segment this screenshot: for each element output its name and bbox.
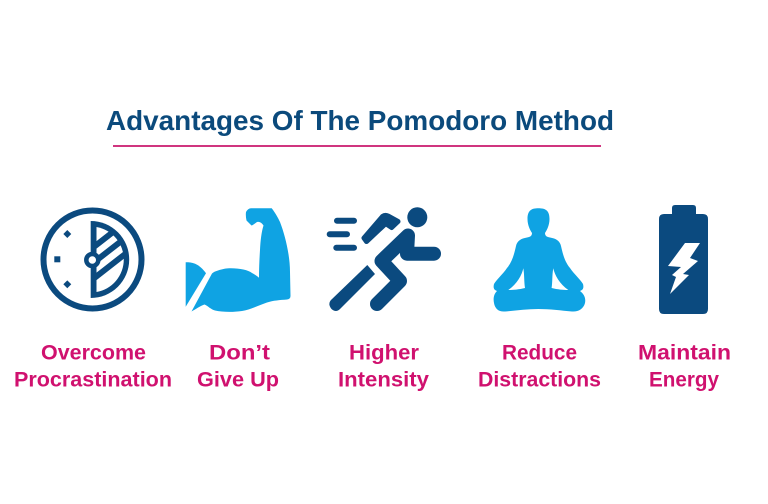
icon: running figure — [329, 207, 434, 311]
label: don't give up — [197, 342, 279, 392]
infographic canvas — [15, 110, 730, 391]
title: Advantages Of The Pomodoro Method — [106, 105, 614, 136]
title underline — [113, 145, 601, 147]
label: overcome procrastination: Procrastination — [14, 368, 172, 392]
label: overcome procrastination: Overcome — [41, 342, 146, 364]
label: don't give up: Don’t — [209, 342, 270, 364]
label: reduce distractions: Reduce — [502, 342, 577, 364]
label: maintain energy — [638, 342, 731, 392]
icon: flexed arm — [186, 208, 290, 312]
label: overcome procrastination — [14, 342, 172, 392]
label: reduce distractions: Distractions — [478, 368, 601, 392]
label: don't give up: Give Up — [197, 368, 279, 392]
label: maintain energy: Energy — [649, 368, 719, 392]
label: reduce distractions — [478, 342, 601, 392]
icon: battery — [659, 205, 708, 314]
label: higher intensity: Higher — [349, 342, 419, 364]
icon: meditating figure — [494, 208, 585, 312]
label: higher intensity — [338, 342, 429, 392]
label: higher intensity: Intensity — [338, 368, 429, 392]
label: maintain energy: Maintain — [638, 342, 731, 364]
icon: clock — [44, 210, 142, 308]
